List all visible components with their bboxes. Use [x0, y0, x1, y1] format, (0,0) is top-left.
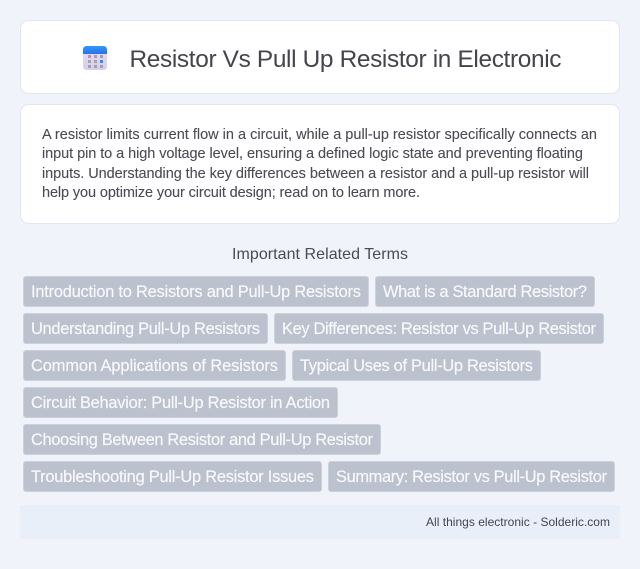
tag: summary — [328, 462, 614, 492]
panel: title — [20, 20, 620, 94]
description line 2: input pin to a high voltage level, ensuring a defined logic state and preventing floating — [42, 146, 583, 162]
tag: choosing — [24, 424, 380, 454]
tag: understanding: Understanding Pull-Up Resistors — [31, 320, 260, 338]
heading: important related terms: Important Related Terms — [232, 246, 408, 263]
footer — [20, 505, 620, 539]
description line 4: help you optimize your circuit design; read on to learn more. — [42, 185, 420, 201]
tag: troubleshooting: Troubleshooting Pull-Up Resistor Issues — [31, 468, 314, 486]
tag: choosing: Choosing Between Resistor and Pull-Up Resistor — [31, 431, 374, 449]
tag: key differences: Key Differences: Resistor vs Pull-Up Resistor — [282, 320, 597, 338]
tag: standard resistor: What is a Standard Resistor? — [383, 283, 587, 301]
title text: Resistor Vs Pull Up Resistor in Electronic — [130, 46, 562, 73]
tag: introduction: Introduction to Resistors and Pull-Up Resistors — [31, 283, 361, 301]
tag: understanding — [24, 314, 268, 344]
tag: common applications: Common Applications of Resistors — [31, 357, 278, 375]
tag: circuit behavior: Circuit Behavior: Pull-Up Resistor in Action — [31, 394, 330, 412]
tag: typical uses — [292, 350, 540, 380]
tag: common applications — [24, 350, 286, 380]
icon: calendar — [83, 46, 107, 70]
tag: troubleshooting — [24, 462, 322, 492]
tag: key differences — [274, 314, 604, 344]
footer text: All things electronic - Solderic.com — [426, 515, 610, 529]
tag: typical uses: Typical Uses of Pull-Up Resistors — [300, 357, 533, 375]
description line 3: inputs. Understanding the key differences between a resistor and a pull-up resistor will — [42, 166, 589, 182]
description line 1: A resistor limits current flow in a circuit, while a pull-up resistor specifically connects an — [42, 127, 597, 143]
tag: summary: Summary: Resistor vs Pull-Up Resistor — [336, 468, 608, 486]
tag list — [24, 276, 614, 492]
panel: description — [20, 104, 620, 224]
tag: circuit behavior — [24, 388, 338, 418]
tag: standard resistor — [376, 276, 594, 306]
tag: introduction — [24, 276, 368, 306]
